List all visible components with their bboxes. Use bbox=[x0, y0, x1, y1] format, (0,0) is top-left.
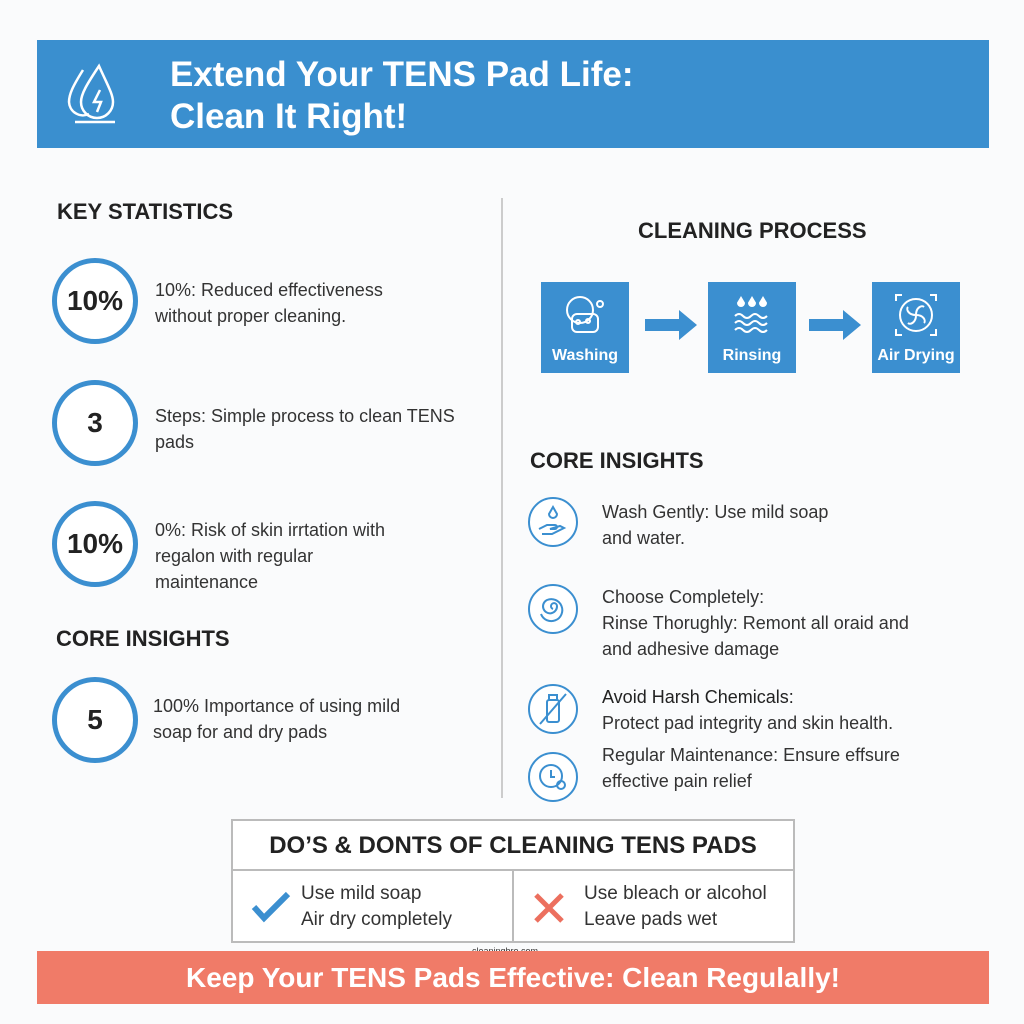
insight 4 bbox=[528, 745, 900, 802]
do list bbox=[252, 883, 452, 930]
insight 2: Choose Completely: bbox=[602, 587, 764, 607]
insight 4: effective pain relief bbox=[602, 771, 752, 791]
don't list bbox=[534, 883, 767, 930]
insight 3 bbox=[528, 684, 893, 734]
don't list: Use bleach or alcohol bbox=[584, 883, 767, 904]
stat 3: maintenance bbox=[155, 572, 258, 592]
step: air drying bbox=[872, 282, 960, 373]
step: air drying: Air Drying bbox=[877, 347, 955, 364]
stat 1: without proper cleaning. bbox=[155, 306, 346, 326]
stat 4: soap for and dry pads bbox=[153, 722, 327, 742]
stat 3 bbox=[52, 501, 385, 592]
icon: water drops bbox=[68, 64, 115, 124]
title: Clean It Right! bbox=[170, 97, 407, 136]
process flow bbox=[541, 282, 960, 373]
do list: Air dry completely bbox=[301, 909, 452, 930]
title: Extend Your TENS Pad Life: bbox=[170, 55, 634, 94]
header banner bbox=[37, 40, 989, 148]
stat 2: pads bbox=[155, 432, 194, 452]
insight 2 bbox=[528, 584, 909, 659]
insight 2: and adhesive damage bbox=[602, 639, 779, 659]
heading: key statistics: KEY STATISTICS bbox=[57, 199, 233, 224]
icon: cross bbox=[534, 893, 564, 923]
stat 1: 10%: Reduced effectiveness bbox=[155, 280, 383, 300]
heading: cleaning process: CLEANING PROCESS bbox=[638, 218, 867, 243]
stat 2 bbox=[52, 380, 455, 466]
heading: core insights right: CORE INSIGHTS bbox=[530, 448, 704, 473]
insight 4: Regular Maintenance: Ensure effsure bbox=[602, 745, 900, 765]
stat 3: regalon with regular bbox=[155, 546, 313, 566]
stat 4: 5 bbox=[87, 704, 103, 735]
do's and don'ts table bbox=[231, 819, 795, 943]
insight 1 bbox=[528, 497, 828, 548]
step: washing: Washing bbox=[552, 347, 618, 364]
insight 1: and water. bbox=[602, 528, 685, 548]
stat 3: 0%: Risk of skin irrtation with bbox=[155, 520, 385, 540]
stat 2: Steps: Simple process to clean TENS bbox=[155, 406, 455, 426]
insight 3: Protect pad integrity and skin health. bbox=[602, 713, 893, 733]
stat 3: 10% bbox=[67, 528, 123, 559]
heading: core insights left: CORE INSIGHTS bbox=[56, 626, 230, 651]
step: rinsing: Rinsing bbox=[723, 347, 781, 364]
table heading bbox=[233, 821, 793, 871]
don't list: Leave pads wet bbox=[584, 909, 717, 930]
footer banner bbox=[37, 951, 989, 1004]
watermark: cleaningbro.com bbox=[472, 946, 538, 956]
stat 2: 3 bbox=[87, 407, 103, 438]
arrow bbox=[645, 310, 697, 340]
table heading: DO’S & DONTS OF CLEANING TENS PADS bbox=[269, 832, 757, 859]
footer banner: Keep Your TENS Pads Effective: Clean Regulally! bbox=[186, 962, 840, 993]
insight 3: Avoid Harsh Chemicals: bbox=[602, 687, 794, 707]
title bbox=[170, 55, 634, 136]
do list: Use mild soap bbox=[301, 883, 421, 904]
stat 4 bbox=[52, 677, 400, 763]
stat 4: 100% Importance of using mild bbox=[153, 696, 400, 716]
stat 1 bbox=[52, 258, 383, 344]
insight 2: Rinse Thorughly: Remont all oraid and bbox=[602, 613, 909, 633]
arrow bbox=[809, 310, 861, 340]
stat 1: 10% bbox=[67, 285, 123, 316]
icon: check bbox=[252, 892, 290, 922]
insight 1: Wash Gently: Use mild soap bbox=[602, 502, 828, 522]
step: rinsing bbox=[708, 282, 796, 373]
step: washing bbox=[541, 282, 629, 373]
